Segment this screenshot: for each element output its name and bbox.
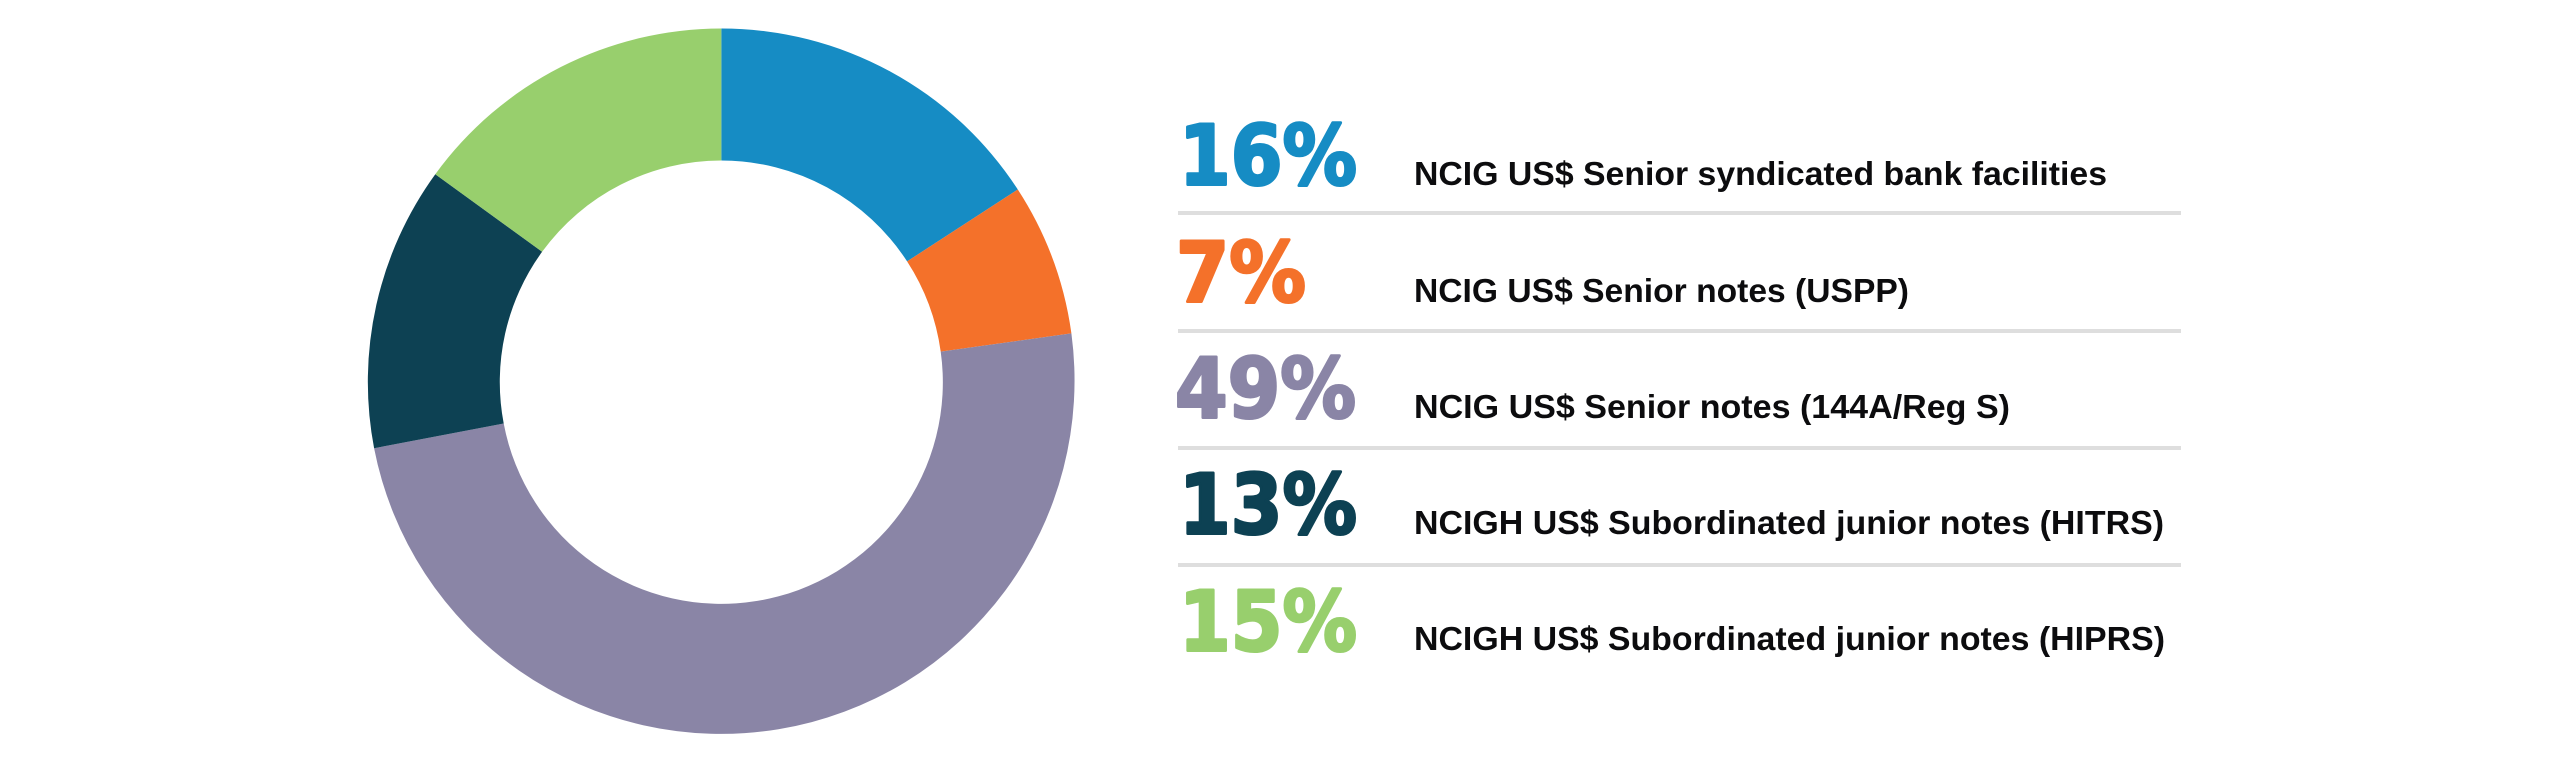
label: NCIGH US$ Subordinated junior notes (HIPRS): NCIGH US$ Subordinated junior notes (HIPRS) [1414,620,2165,657]
legend row: 16% [1179,108,2107,204]
legend row: 13% [1179,456,2164,554]
legend row: 15% [1179,574,2165,670]
segment: 7% senior notes USPP [907,190,1071,352]
percentage 15%: 15% [1179,574,1357,670]
donut chart [368,28,1075,734]
label: NCIG US$ Senior syndicated bank facilities: NCIG US$ Senior syndicated bank facilities [1414,155,2107,192]
label: NCIG US$ Senior notes (144A/Reg S): NCIG US$ Senior notes (144A/Reg S) [1414,388,2010,425]
label: NCIG US$ Senior notes (USPP): NCIG US$ Senior notes (USPP) [1414,272,1909,309]
percentage 49%: 49% [1175,340,1356,438]
legend row: 7% [1176,224,1909,322]
label: NCIGH US$ Subordinated junior notes (HITRS): NCIGH US$ Subordinated junior notes (HITRS) [1414,504,2164,541]
segment: 13% subordinated junior notes HITRS [368,174,542,448]
segment: 15% subordinated junior notes HIPRS [435,28,721,252]
legend [1175,108,2181,670]
percentage 13%: 13% [1179,456,1357,554]
percentage 16%: 16% [1179,108,1357,204]
segment: 49% senior notes 144A/Reg S [374,333,1075,734]
percentage 7%: 7% [1176,224,1306,322]
legend row: 49% [1175,340,2010,438]
segment: 16% senior syndicated bank facilities [721,28,1018,261]
